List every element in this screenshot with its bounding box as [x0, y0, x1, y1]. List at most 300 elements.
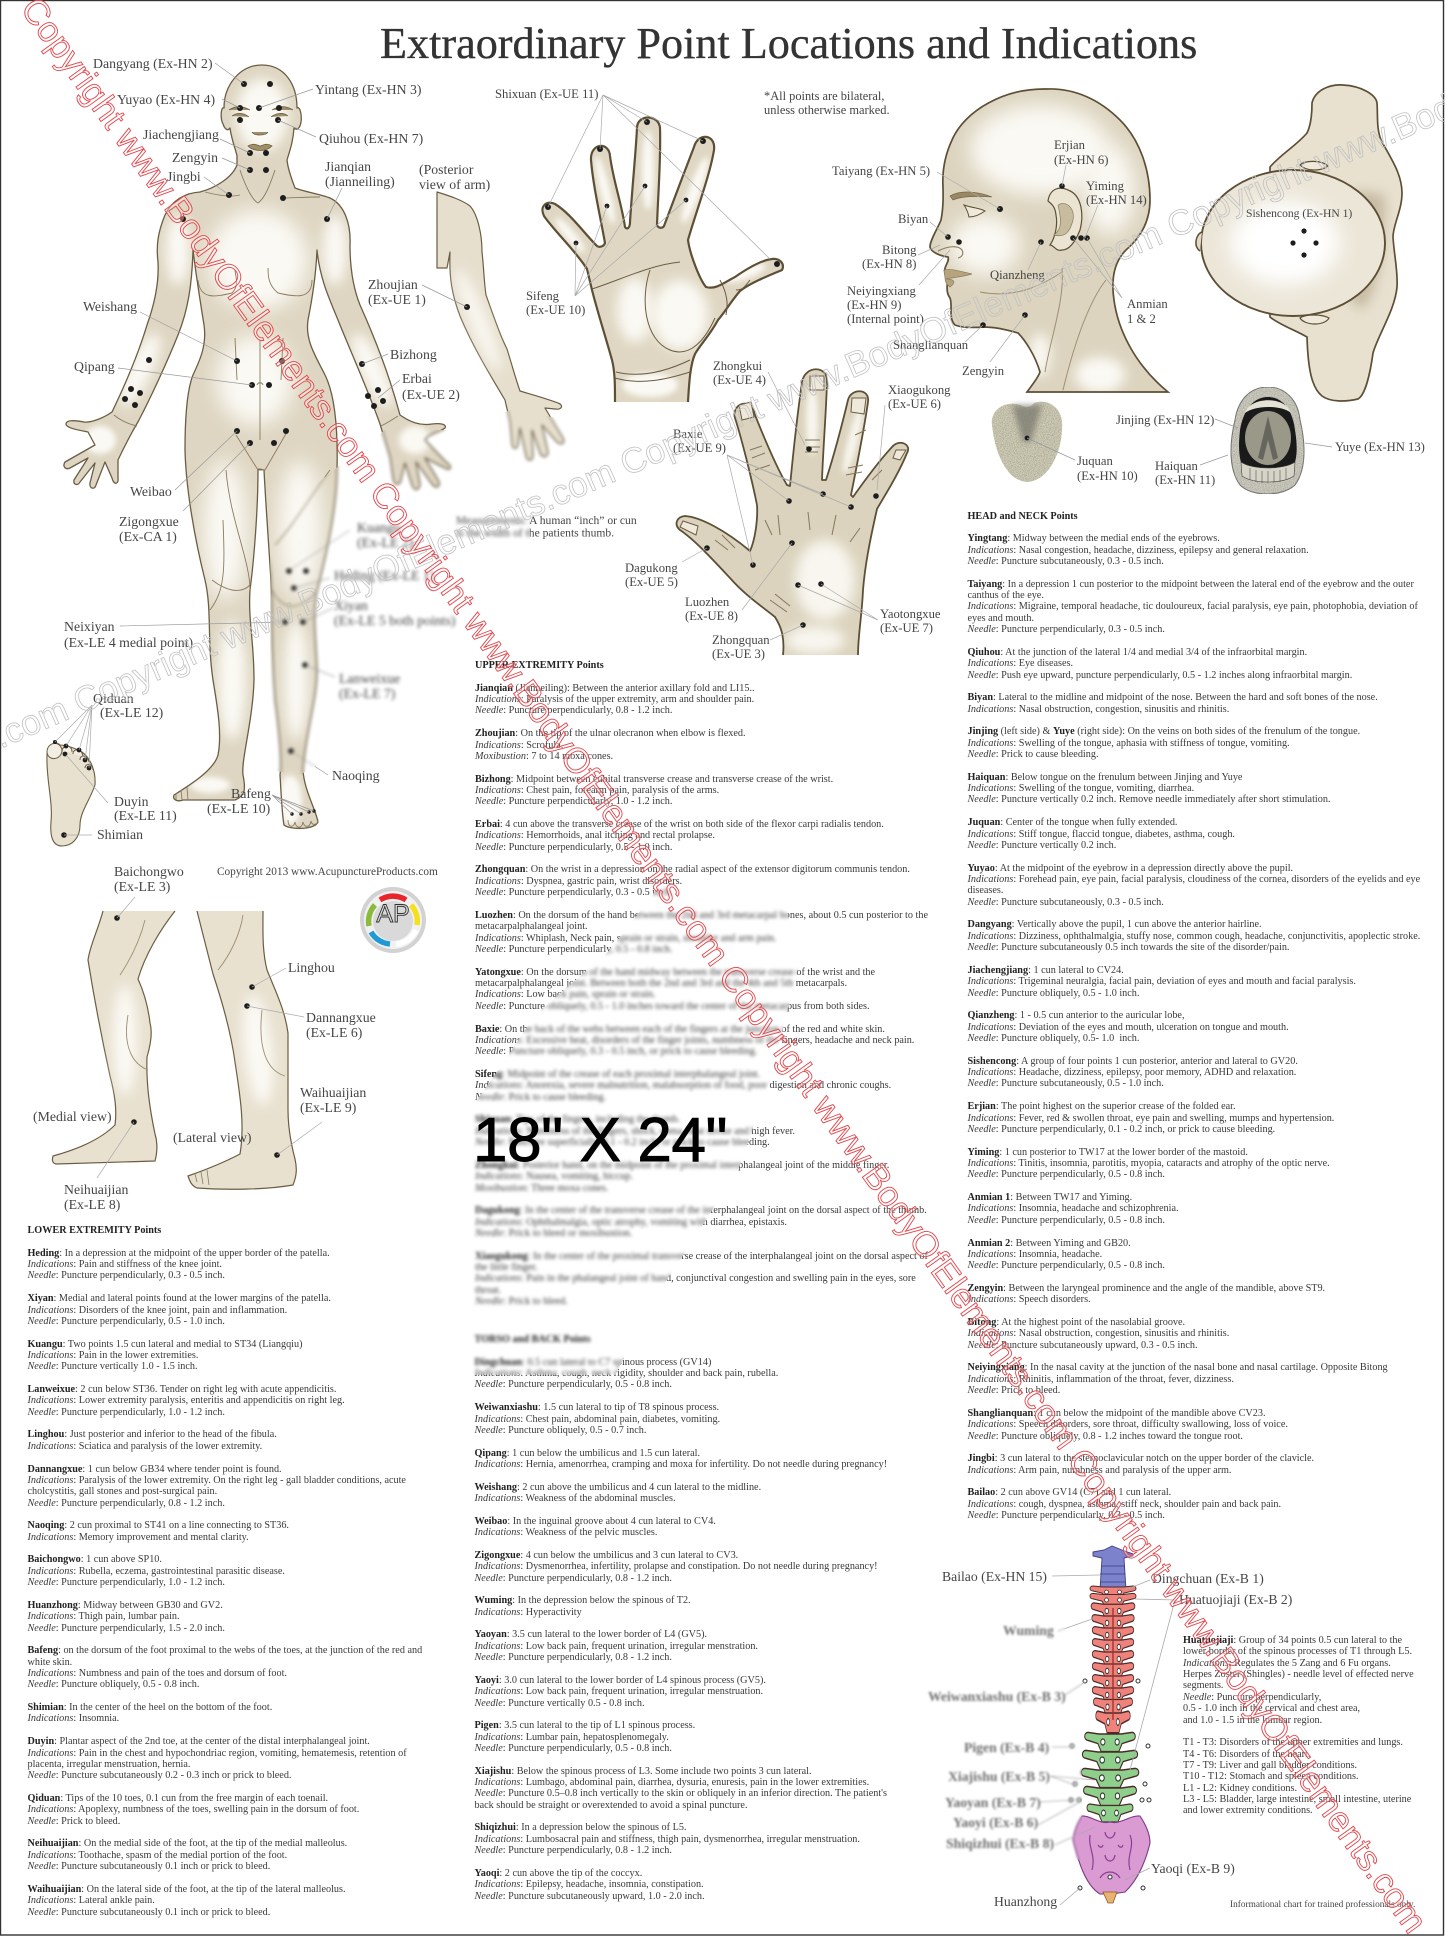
calf highlight [113, 985, 137, 1095]
entry: Yaoyan [474, 1629, 758, 1663]
entry: Yaoqi: Indications: Epilepsy, headache, insomnia, constipation. [474, 1879, 704, 1890]
label: Qipang: Qipang [74, 359, 115, 374]
entry: Erjian: Erjian: The point highest on the superior crease of the folded ear. [968, 1101, 1236, 1112]
head points [945, 183, 1090, 328]
lower tooth separators [1250, 468, 1286, 483]
leg silhouette [188, 911, 296, 1189]
label: Zhoujian: Zhoujian [368, 277, 418, 292]
entry: Shanglianquan: Indications: Speech disorders, sore throat, difficulty swallowing, loss of voice. [968, 1419, 1288, 1430]
entry: Yuyao: Yuyao: At the midpoint of the eyebrow in a depression directly above the pupil. [968, 863, 1293, 874]
entry: Xiyan: Xiyan: Medial and lateral points found at the lower margins of the patella. [28, 1293, 331, 1304]
label: Weibao: Weibao [130, 484, 172, 499]
leader lines [118, 63, 400, 814]
logo green arc [369, 905, 375, 926]
entry: Baichongwo [27, 1554, 285, 1588]
label: Dagukong: (Ex-UE 5) [625, 575, 678, 589]
entry: Taiyang: Needle: Puncture perpendicularly, 0.3 - 0.5 inch. [968, 624, 1165, 635]
sacrum [1073, 1816, 1150, 1894]
entry: Haiquan: Haiquan: Below tongue on the frenulum between Jinjing and Yuye [968, 772, 1242, 783]
entry: Anmian 2: Indications: Insomnia, headache. [968, 1249, 1102, 1260]
lumbar vertebrae [1081, 1732, 1139, 1822]
entry: Bizhong: Bizhong: Midpoint between cubital transverse crease and transverse crease of the wrist. [475, 774, 833, 785]
entry: Zhongquan [474, 864, 910, 898]
label: Kuangu: Kuangu [357, 520, 401, 535]
label: Bafeng: Bafeng [231, 786, 271, 801]
entry: Wuming: Indications: Hyperactivity [474, 1607, 582, 1618]
Huatuojiaji description: and 1.0 - 1.5 in the lumbar region. [1183, 1715, 1322, 1726]
figure: open mouth [1116, 387, 1425, 494]
lower teeth [1241, 462, 1295, 482]
thoracic vertebrae [1090, 1586, 1136, 1733]
entry: Qianzheng: Needle: Puncture obliquely, 0.5- 1.0 inch. [968, 1033, 1139, 1044]
entry: Bailao: Indications: cough, dyspnea, asthma, stiff neck, shoulder pain and back pain. [968, 1499, 1281, 1510]
entry: Zengyin [968, 1283, 1420, 1306]
entry: Qiuhou: Indications: Eye diseases. [968, 658, 1073, 669]
entry: Kuangu: Indications: Pain in the lower extremities. [28, 1350, 198, 1361]
leader lines [548, 95, 770, 296]
label: Bafeng: (Ex-LE 10) [207, 801, 270, 817]
entry: Jianqian: Needle: Puncture perpendicularly, 0.8 - 1.2 inch. [475, 705, 672, 716]
entry: Jianqian: Indications: Paralysis of the upper extremity, arm and shoulder pain. [475, 694, 754, 705]
entry: Qiduan: Indications: Apoplexy, numbness of the toes, swelling pain in the dorsum of foot. [28, 1804, 359, 1815]
entry: Weiwanxiashu: Indications: Chest pain, abdominal pain, diabetes, vomiting. [474, 1414, 720, 1425]
entry: Yaoyan: Indications: Low back pain, frequent urination, irregular menstration. [474, 1641, 758, 1652]
entry: Linghou [28, 1429, 277, 1452]
label: Kuangu: (Ex-LE 2) [357, 535, 413, 551]
label: Lanweixue: Lanweixue [339, 671, 400, 686]
entry: Shixuan: Indications: Numbness of the fingers, shock, coma, heat stroke and high fever. [475, 1126, 795, 1137]
entry: Zigongxue: Indications: Dysmenorrhea, infertility, prolapse and constipation. Do not needle during pregnancy! [474, 1561, 878, 1572]
label: Qiduan: (Ex-LE 12) [100, 705, 163, 721]
heading: HEAD and NECK Points [968, 510, 1078, 522]
label: Baxie: (Ex-UE 9) [673, 441, 726, 455]
label: lateral view: (Lateral view) [173, 1130, 252, 1146]
thoracic midline [1112, 1608, 1114, 1720]
logo red arc [380, 896, 406, 900]
entry: Dangyang: Needle: Puncture subcutaneously 0.5 inch towards the site of the disorder/pain. [968, 942, 1289, 953]
entry: Dagukong [474, 1204, 927, 1239]
figure: palm hand [495, 87, 790, 405]
entry: Huanzhong: Indications: Thigh pain, lumbar pain. [28, 1611, 180, 1622]
entry: Yaoyi: Yaoyi: 3.0 cun lateral to the lower border of L4 spinous process (GV5). [474, 1675, 766, 1686]
entry: Weiwanxiashu [474, 1402, 720, 1436]
label: Luozhen: (Ex-UE 8) [685, 609, 738, 623]
entry: Wuming: Wuming: In the depression below the spinous of T2. [474, 1595, 691, 1606]
entry: Yiming: Needle: Puncture perpendicularly, 0.5 - 0.8 inch. [968, 1169, 1165, 1180]
label: Shixuan: Shixuan (Ex-UE 11) [495, 87, 598, 101]
label: Shimian: Shimian [97, 827, 143, 842]
entry: Anmian 1 [968, 1192, 1420, 1226]
entry: Bizhong [474, 774, 833, 807]
label: Erjian: Erjian [1054, 138, 1085, 152]
entry: Zengyin: Zengyin: Between the laryngeal prominence and the angle of the mandible, above ST9. [968, 1283, 1325, 1294]
label: Dangyang: Dangyang (Ex-HN 2) [93, 56, 213, 72]
label: posterior view: (Posterior [419, 162, 473, 177]
figure: foot sole [47, 691, 177, 846]
leader line [422, 285, 467, 307]
entry: Sishencong: Indications: Headache, dizziness, epilepsy, poor memory, ADHD and relaxation. [968, 1067, 1296, 1078]
mouth outer lips [1231, 387, 1304, 494]
entry: Yingtang: Needle: Puncture subcutaneously, 0.3 - 0.5 inch. [968, 556, 1164, 567]
entry: Huanzhong [27, 1600, 225, 1634]
label: Yaotongxue: Yaotongxue [880, 607, 941, 621]
heading: TORSO and BACK Points [474, 1334, 591, 1345]
Huatuojiaji description: 0.5 - 1.0 inch in the cervical and chest area, [1183, 1703, 1360, 1714]
entry: Huanzhong: Huanzhong: Midway between GB30 and GV2. [28, 1600, 223, 1611]
label: Bizhong: Bizhong [390, 347, 437, 362]
label: Huatuojiaji: Huatuojiaji (Ex-B 2) [1179, 1592, 1292, 1608]
label: Pigen: Pigen (Ex-B 4) [964, 1740, 1049, 1756]
upper teeth [1245, 400, 1291, 413]
label: Zengyin: Zengyin [172, 150, 218, 165]
entry: Zhongquan: Indications: Dyspnea, gastric pain, wrist disorders. [475, 876, 682, 887]
entry: Haiquan: Indications: Swelling of the tongue, vomiting, diarrhea. [968, 783, 1194, 794]
note: measurements: Measurements: A human “inch” or cun [456, 514, 637, 527]
entry: Jianqian [474, 683, 755, 716]
entry: Taiyang: Indications: Migraine, temporal headache, tic douloureux, facial paralysis, eye pain, photophobia, deviation of [968, 601, 1418, 612]
entry: Kuangu: Kuangu: Two points 1.5 cun lateral and medial to ST34 (Liangqiu) [28, 1339, 302, 1350]
toes [195, 1170, 209, 1185]
entry: Anmian 1: Anmian 1: Between TW17 and Yiming. [968, 1192, 1132, 1203]
entry: Shixuan: Shixuan: Tips of the fingers, including the thumb. [475, 1114, 680, 1125]
label: Heding: Heding (Ex-LE 1) [334, 568, 434, 584]
sole points [53, 740, 91, 838]
label: Waihuaijian: Waihuaijian [300, 1085, 366, 1100]
entry: Naoqing: Naoqing: 2 cun proximal to ST41 on a line connecting to ST36. [28, 1520, 289, 1531]
entry: Zhoujian: Indications: Scrofula. [475, 740, 563, 751]
entry: Bailao: Bailao: 2 cun above GV14 (C7) and 1 cun lateral. [968, 1487, 1171, 1498]
entry: Anmian 1: Needle: Puncture perpendicularly, 0.5 - 0.8 inch. [968, 1215, 1165, 1226]
sacral details [1090, 1832, 1132, 1878]
entry: Kuangu: Needle: Puncture vertically 1.0 - 1.5 inch. [28, 1361, 198, 1372]
levels list: T1 - T3: Disorders of the upper extremities and lungs. [1183, 1737, 1403, 1748]
entry: Taiyang: Taiyang: In a depression 1 cun posterior to the midpoint between the lateral end of the eyebrow and the outer [968, 579, 1414, 590]
entry: Heding: Needle: Puncture perpendicularly, 0.3 - 0.5 inch. [28, 1270, 225, 1281]
entry: Shanglianquan: Shanglianquan: 1 cun below the midpoint of the mandible above CV23. [968, 1408, 1266, 1419]
levels list: L1 - L2: Kidney conditions. [1183, 1783, 1297, 1794]
entry: Haiquan: Needle: Puncture vertically 0.2 inch. Remove needle immediately after short stimulation. [968, 794, 1330, 805]
label: Jianqian: Jianqian [325, 159, 371, 174]
entry: Neiyingxiang [968, 1362, 1420, 1397]
label: Sishencong: Sishencong (Ex-HN 1) [1246, 207, 1352, 220]
arm silhouette [437, 192, 564, 460]
label: Wuming: Wuming [1003, 1623, 1054, 1638]
levels list: and lower extremity conditions. [1183, 1805, 1313, 1816]
entry: Taiyang: canthus of the eye. [968, 590, 1044, 601]
entry: Yaoyi: Needle: Puncture vertically 0.5 - 0.8 inch. [474, 1698, 645, 1708]
entry: Shanglianquan [968, 1408, 1420, 1442]
entry: Qiduan: Needle: Prick to bleed. [28, 1816, 120, 1827]
entry: Jinjing and Yuye: Jinjing (left side) & Yuye (right side): On the veins on both sides of the frenulum of the tongue. [968, 726, 1360, 737]
entry: Luozhen: Needle: Puncture perpendicularly, 0.5 - 0.8 inch. [475, 944, 672, 955]
entry: Zhoujian: Zhoujian: On the tip of the ulnar olecranon when elbow is flexed. [475, 728, 746, 739]
entry: Bitong: Indications: Nasal obstruction, congestion, sinusitis and rhinitis. [968, 1328, 1229, 1339]
entry: Weishang [474, 1482, 761, 1504]
label: Zigongxue: Zigongxue [119, 514, 179, 529]
entry: Neiyingxiang: Needle: Prick to bleed. [968, 1385, 1060, 1396]
label: Xiaogukong: Xiaogukong [888, 383, 950, 397]
entry: Heding [27, 1248, 330, 1281]
entry: Xiajishu: Needle: Puncture 0.5–0.8 inch vertically to the skin or obliquely in an inferior direction. The patient's [474, 1788, 887, 1799]
entry: Dagukong: Indications: Ophthalmalgia, optic atrophy, vomiting with diarrhea, epistaxis. [475, 1217, 787, 1228]
label: Yaoqi: Yaoqi (Ex-B 9) [1151, 1861, 1235, 1877]
entry: Zigongxue [474, 1550, 878, 1584]
entry: Bafeng: white skin. [28, 1657, 72, 1668]
entry: Shiqizhui [474, 1822, 887, 1857]
Huatuojiaji description: segments. [1183, 1680, 1223, 1691]
label: Xiajishu: Xiajishu (Ex-B 5) [948, 1769, 1050, 1785]
label: Jingbi: Jingbi [167, 169, 201, 184]
entry: Zhongquan: Needle: Puncture perpendicularly, 0.3 - 0.5 inch. [475, 887, 672, 898]
head silhouette [925, 85, 1170, 395]
logo inner disc [373, 901, 413, 941]
entry: Yaoyan: Yaoyan: 3.5 cun lateral to the lower border of L4 (GV5). [474, 1629, 707, 1640]
entry: Neiyingxiang: Indications: Rhinitis, inflammation of the throat, fever, dizziness. [968, 1374, 1234, 1385]
leader lines [1200, 419, 1332, 465]
entry: Xiajishu [474, 1766, 887, 1811]
label: Qiuhou: Qiuhou (Ex-HN 7) [319, 131, 423, 147]
entry: Jinjing and Yuye: Needle: Prick to cause bleeding. [968, 749, 1098, 760]
figure: posterior arm [368, 162, 564, 460]
entry: Qiduan [27, 1793, 359, 1827]
leader line [1027, 438, 1075, 460]
body silhouette [60, 60, 455, 835]
entry: Zhongkui [474, 1158, 889, 1194]
entry: Qipang [474, 1448, 887, 1470]
label: Taiyang: Taiyang (Ex-HN 5) [832, 164, 930, 178]
entry: Bitong: Bitong: At the highest point of the nasolabial groove. [968, 1317, 1185, 1328]
entry: Juquan [968, 817, 1420, 851]
entry: Sifeng: Indications: Anorexia, severe malnutrition, malabsorption of food, poor digestion and chronic coughs. [475, 1080, 891, 1091]
label: Bitong: Bitong [882, 243, 916, 257]
entry: Biyan [968, 692, 1420, 715]
label: Baichongwo: (Ex-LE 3) [114, 879, 170, 895]
entry: Bafeng: Bafeng: on the dorsum of the foot proximal to the webs of the toes, at the junction of the red and [28, 1645, 422, 1656]
eyebrow [950, 192, 992, 200]
note: measurements: is the width of the patients thumb. [456, 526, 614, 540]
entry: Pigen [474, 1720, 887, 1754]
palm silhouette [535, 110, 790, 405]
entry: Xiaogukong: Needle: Prick to bleed. [475, 1296, 568, 1307]
entry: Weishang: Indications: Weakness of the abdominal muscles. [474, 1493, 676, 1504]
label: Erjian: (Ex-HN 6) [1054, 153, 1108, 167]
entry: Xiaogukong: throat. [475, 1285, 501, 1296]
entry: Baichongwo: Indications: Rubella, eczema, gastrointestinal parasitic disease. [28, 1566, 285, 1577]
Sishencong points [1290, 228, 1319, 258]
dark mouth interior [1239, 397, 1297, 468]
label: Zhoujian: (Ex-UE 1) [368, 292, 426, 308]
shoulder shading [1350, 190, 1385, 310]
entry: Erjian: Needle: Puncture perpendicularly, 0.1 - 0.2 inch, or prick to cause bleeding. [968, 1124, 1275, 1135]
entry: Juquan: Needle: Puncture vertically 0.2 inch. [968, 840, 1116, 851]
leader lines [682, 372, 885, 640]
entry: Zhongkui: Moxibustion: Three moxa cones. [475, 1183, 608, 1194]
ear [1048, 188, 1082, 250]
panel: Huatuojiaji notes [1183, 1635, 1414, 1828]
entry: Lanweixue: Indications: Lower extremity paralysis, enteritis and appendicitis on right leg. [28, 1395, 345, 1406]
levels list: L3 - L5: Bladder, large intestine, small intestine, uterine [1183, 1794, 1411, 1805]
entry: Wuming [474, 1595, 691, 1618]
label: Sifeng: Sifeng [526, 289, 559, 303]
levels list: T10 - T12: Stomach and spleen conditions. [1183, 1771, 1359, 1782]
entry: Sifeng [474, 1068, 891, 1104]
entry: Duyin: Duyin: Plantar aspect of the 2nd toe, at the center of the distal interphalangeal joint. [28, 1736, 370, 1747]
entry: Shimian: Shimian: In the center of the heel on the bottom of the foot. [28, 1702, 272, 1713]
entry: Erbai [474, 819, 884, 853]
Huatuojiaji description: Indications: Regulates the 5 Zang and 6 Fu organs. [1183, 1658, 1391, 1669]
figure: front body [60, 56, 460, 835]
entry: Juquan: Indications: Stiff tongue, flaccid tongue, diabetes, asthma, cough. [968, 829, 1235, 840]
entry: Zhoujian [474, 728, 746, 762]
figure: head top view [1196, 85, 1402, 401]
label: Bailao: Bailao (Ex-HN 15) [942, 1569, 1047, 1585]
label: Anmian: Anmian [1127, 297, 1168, 311]
label: Yiming: Yiming [1086, 179, 1124, 193]
Huatuojiaji description: Needle: Puncture perpendicularly, [1183, 1692, 1321, 1703]
shoulders from above [1270, 85, 1402, 401]
entry: Yiming: Indications: Tinitis, insomnia, parotitis, myopia, cataracts and atrophy of the optic nerve. [968, 1158, 1330, 1169]
entry: Shiqizhui: Shiqizhui: In a depression below the spinous of L5. [474, 1822, 686, 1833]
figure: tongue [992, 402, 1138, 483]
eye [964, 205, 985, 217]
label: posterior view: view of arm) [419, 177, 490, 193]
tongue center shading [1012, 405, 1042, 442]
leg silhouette [52, 911, 175, 1164]
label: Zengyin: Zengyin [962, 364, 1005, 378]
label: Bitong: (Ex-HN 8) [862, 257, 916, 271]
entry: Yaoqi: Yaoqi: 2 cun above the tip of the coccyx. [474, 1868, 642, 1879]
entry: Naoqing [28, 1520, 289, 1543]
entry: Sifeng: Sifeng: Midpoint of the crease of each proximal interphalangeal joint. [475, 1069, 760, 1080]
entry: Waihuaijian: Waihuaijian: On the lateral side of the foot, at the tip of the lateral malleolus. [28, 1884, 346, 1895]
entry: Weibao [474, 1516, 716, 1538]
entry: Weishang: Weishang: 2 cun above the umbilicus and 4 cun lateral to the midline. [474, 1482, 761, 1493]
entry: Heding: Indications: Pain and stiffness of the knee joint. [28, 1259, 222, 1270]
figure: head profile [832, 85, 1170, 395]
face details [229, 107, 293, 150]
label: Yaoyi: Yaoyi (Ex-B 6) [953, 1815, 1038, 1831]
heading: UPPER EXTREMITY Points [475, 660, 604, 671]
label: Shanglianquan: Shanglianquan [893, 338, 969, 352]
label: Jianqian: (Jianneiling) [325, 174, 395, 190]
entry: Dagukong: Dagukong: In the center of the transverse crease of the interphalangeal joint on the dorsal aspect of the thumb. [475, 1205, 927, 1216]
entry: Dingchuan: Dingchuan: 0.5 cun lateral to C7 spinous process (GV14) [474, 1357, 711, 1368]
figure: dorsal hand [625, 359, 951, 661]
entry: Luozhen: Indications: Whiplash, Neck pain, sprain or strain, shoulder and arm pain. [475, 933, 776, 944]
entry: Neihuaijian: Neihuaijian: On the medial side of the foot, at the tip of the medial malleolus. [28, 1838, 347, 1849]
title: Extraordinary Point Locations and Indications [380, 19, 1197, 68]
label: Linghou: Linghou [288, 960, 335, 975]
entry: Dangyang: Dangyang: Vertically above the pupil, 1 cun above the anterior hairline. [968, 919, 1262, 930]
label: Dingchuan: Dingchuan (Ex-B 1) [1152, 1571, 1264, 1587]
levels list [1183, 1737, 1414, 1817]
label: Yaoyan: Yaoyan (Ex-B 7) [945, 1795, 1041, 1811]
entry: Duyin: Needle: Puncture subcutaneously 0.2 - 0.3 inch or prick to bleed. [28, 1770, 291, 1781]
label: Xiyan: Xiyan [334, 598, 368, 613]
entry: Weiwanxiashu: Needle: Puncture obliquely, 0.5 - 0.7 inch. [474, 1425, 646, 1436]
entry: Duyin [27, 1736, 407, 1781]
leader lines [918, 165, 1122, 362]
entry: Erjian [968, 1101, 1420, 1135]
entry: Anmian 2: Anmian 2: Between Yiming and GB20. [968, 1238, 1131, 1248]
lateral leg points [244, 984, 280, 1158]
entry: Pigen: Pigen: 3.5 cun lateral to the tip of L1 spinous process. [474, 1720, 695, 1731]
logo white arc [396, 930, 416, 944]
entry: Baxie: Needle: Puncture obliquely, 0.3 - 0.5 inch, or prick to cause bleeding. [475, 1046, 757, 1057]
label: Baichongwo: Baichongwo [114, 864, 184, 879]
dorsal hand silhouette [670, 360, 915, 660]
panel: torso and back points [472, 1332, 887, 1902]
entry: Luozhen [474, 909, 928, 956]
entry: Taiyang [968, 579, 1420, 635]
entry: Yiming [968, 1147, 1420, 1181]
label: Shiqizhui: Shiqizhui (Ex-B 8) [946, 1836, 1054, 1852]
entry: Yuyao: Indications: Forehead pain, eye pain, facial paralysis, cloudiness of the cornea, disorders of the eyelids and eye [968, 874, 1420, 885]
entry: Qianzheng [968, 1010, 1420, 1044]
entry: Erjian: Indications: Fever, red & swollen throat, eye pain and swelling, mumps and hypertension. [968, 1113, 1334, 1124]
entry: Luozhen: Luozhen: On the dorsum of the hand between the 2nd and 3rd metacarpal bones, about 0.5 cun posterior to the [475, 910, 928, 921]
entry: Shimian: Indications: Insomnia. [28, 1713, 119, 1724]
entry: Bafeng [27, 1645, 422, 1690]
entry: Yaoyan: Needle: Puncture perpendicularly, 0.8 - 1.2 inch. [474, 1652, 672, 1663]
nostril [938, 247, 963, 258]
entry: Yingtang: Yingtang: Midway between the medial ends of the eyebrows. [968, 533, 1220, 544]
tongue shape [992, 402, 1062, 482]
label: Jinjing: Jinjing (Ex-HN 12) [1116, 413, 1214, 427]
label: Neixiyan: (Ex-LE 4 medial point) [64, 635, 193, 651]
entry: Biyan: Biyan: Lateral to the midline and midpoint of the nose. Between the hard and soft bones of the nose. [968, 692, 1378, 703]
label: Zigongxue: (Ex-CA 1) [119, 529, 177, 545]
entry: Weibao: Indications: Weakness of the pelvic muscles. [474, 1527, 657, 1538]
label: Neiyingxiang: (Ex-HN 9) [847, 298, 901, 312]
label: Yintang: Yintang (Ex-HN 3) [315, 82, 422, 98]
entry: Huanzhong: Needle: Puncture perpendicularly, 1.5 - 2.0 inch. [28, 1623, 225, 1634]
entry: Jiachengjiang: Indications: Trigeminal neuralgia, facial pain, deviation of eyes and mouth and facial paralysis. [968, 976, 1356, 987]
label: Yuyao: Yuyao (Ex-HN 4) [117, 92, 215, 108]
entry: Naoqing: Indications: Memory improvement and mental clarity. [28, 1532, 249, 1543]
Huatuojiaji description: lower border of the spinous processes of T1 through L5. [1183, 1646, 1412, 1657]
figure: spine [928, 1546, 1292, 1909]
label: Duyin: Duyin [114, 794, 148, 809]
entry: Neihuaijian: Indications: Toothache, spasm of the medial portion of the foot. [28, 1850, 287, 1861]
leader lines [55, 705, 108, 835]
entry: Shanglianquan: Needle: Puncture obliquely, 0.8 - 1.2 inches toward the tongue root. [968, 1431, 1243, 1442]
entry: Shixuan [474, 1112, 795, 1149]
entry: Waihuaijian: Needle: Puncture subcutaneously 0.1 inch or prick to bleed. [28, 1907, 270, 1918]
entry: Qianzheng: Indications: Deviation of the eyes and mouth, ulceration on tongue and mouth. [968, 1022, 1289, 1033]
entry: Jinjing and Yuye [968, 726, 1420, 760]
entry: Waihuaijian: Indications: Lateral ankle pain. [28, 1895, 155, 1906]
entry: Jianqian: Jianqian (Jianneiling): Between the anterior axillary fold and LI15.. [475, 683, 755, 694]
entry: Bizhong: Indications: Chest pain, forearm pain, paralysis of the arms. [475, 785, 719, 796]
entry: Yuyao: diseases. [968, 885, 1003, 896]
coccyx [1103, 1892, 1117, 1903]
medial leg points [114, 915, 137, 1125]
entry: Dannangxue: Dannangxue: 1 cun below GB34 where tender point is found. [28, 1464, 282, 1475]
entry: Bafeng: Indications: Numbness and pain of the toes and dorsum of foot. [28, 1668, 287, 1679]
entry: Jingbi: Jingbi: 3 cun lateral to the sternoclavicular notch on the upper border of the clavicle. [968, 1453, 1314, 1464]
label: Weishang: Weishang [83, 299, 137, 314]
label: Zhongquan: (Ex-UE 3) [712, 647, 765, 661]
entry: Xiyan: Needle: Puncture perpendicularly, 0.5 - 1.0 inch. [28, 1316, 225, 1327]
entry: Shiqizhui: Needle: Puncture perpendicularly, 0.8 - 1.2 inch. [474, 1845, 672, 1856]
entry: Baxie [474, 1023, 914, 1058]
logo yellow arc [411, 905, 417, 925]
entry: Zengyin: Indications: Speech disorders. [968, 1294, 1091, 1305]
entry: Anmian 2: Needle: Puncture perpendicularly, 0.5 - 0.8 inch. [968, 1260, 1165, 1271]
heading: LOWER EXTREMITY Points [28, 1225, 161, 1236]
label: Yiming: (Ex-HN 14) [1086, 193, 1147, 207]
